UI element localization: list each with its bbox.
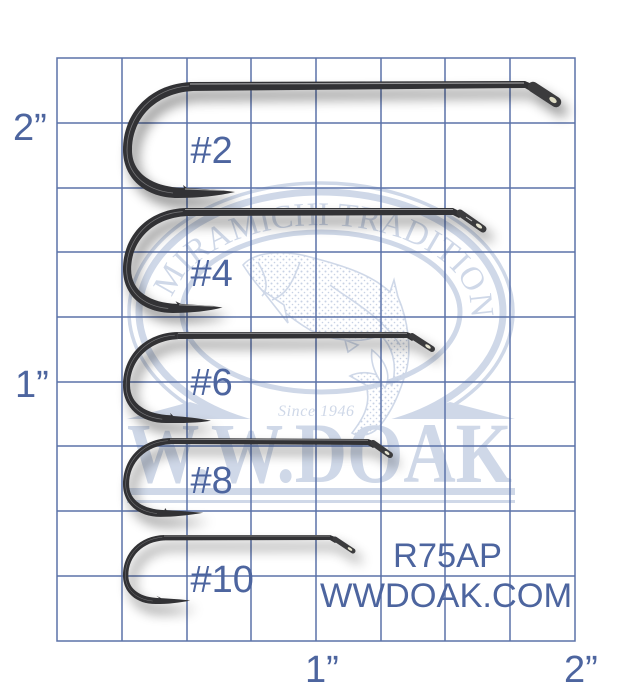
hook size 8 <box>123 438 390 517</box>
website: WWDOAK.COM <box>320 577 572 615</box>
logo arc text: MIRAMICHI TRADITION <box>153 203 494 316</box>
axis label y 1 inch: 1” <box>15 364 49 406</box>
model name: R75AP <box>393 537 502 575</box>
grid <box>57 58 575 641</box>
hook size 2 <box>123 81 558 198</box>
size label 6: #6 <box>190 362 233 404</box>
logo oval rings <box>120 183 520 499</box>
watermark logo <box>127 181 515 503</box>
logo lower bands <box>127 488 515 503</box>
size label 2: #2 <box>190 130 233 172</box>
axis label x 2 inch: 2” <box>564 649 598 691</box>
logo fish <box>243 253 409 435</box>
logo name: W.W.DOAK <box>127 405 512 501</box>
size label 10: #10 <box>190 559 254 601</box>
hook size 6 <box>123 332 432 423</box>
size label 8: #8 <box>190 460 233 502</box>
hook size 4 <box>123 208 483 313</box>
logo since text: Since 1946 <box>278 403 355 420</box>
hook size 10 <box>123 535 353 604</box>
size label 4: #4 <box>190 253 233 295</box>
axis label x 1 inch: 1” <box>305 649 339 691</box>
axis label y 2 inch: 2” <box>13 107 47 149</box>
